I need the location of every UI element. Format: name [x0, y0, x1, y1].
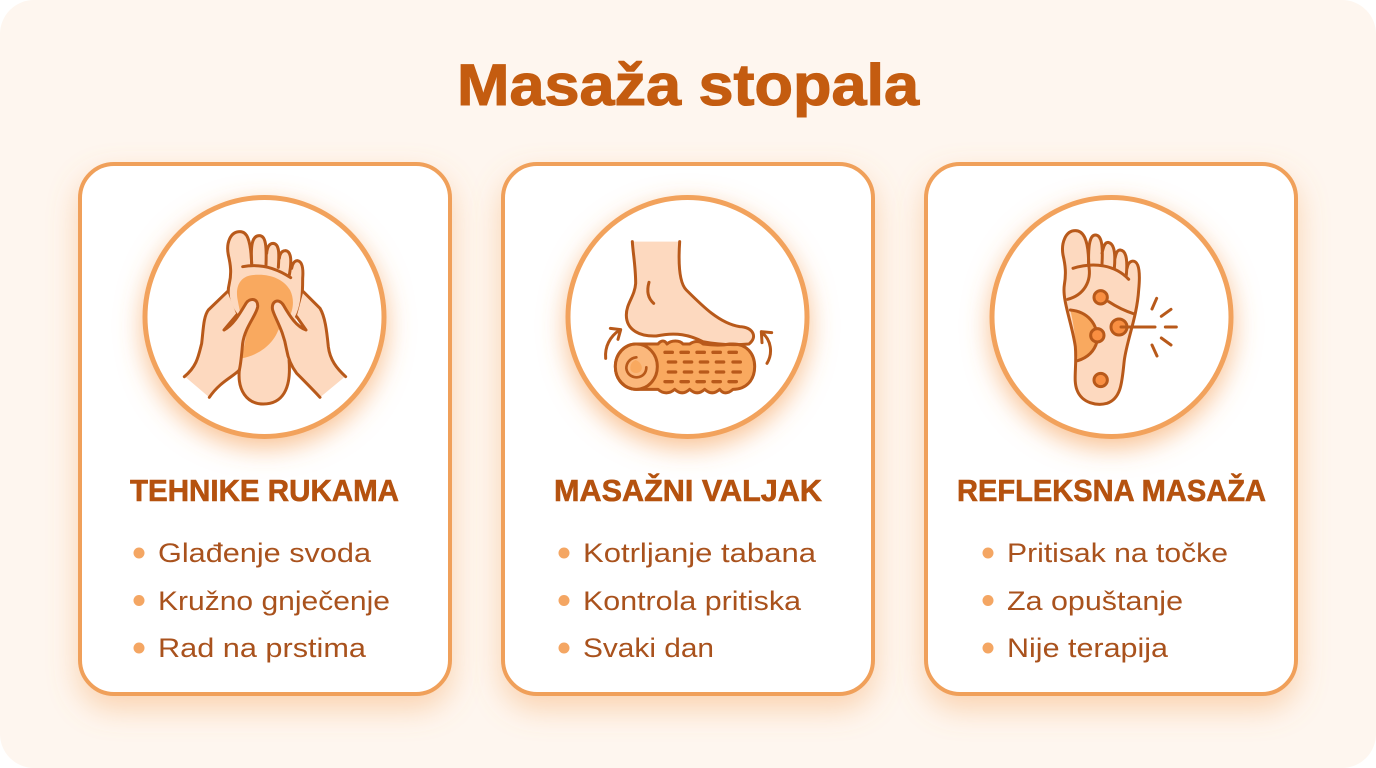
- bullet list: [982, 538, 1228, 663]
- bullet list: [134, 538, 390, 663]
- bullet list: Glađenje svoda: [158, 538, 372, 568]
- panel: masažni valjak: [503, 164, 873, 694]
- bullet list: Svaki dan: [583, 633, 714, 663]
- icon: hands massaging foot: [145, 198, 384, 436]
- bullet list: Za opuštanje: [1007, 586, 1183, 616]
- right hand: [272, 292, 345, 397]
- heading: TEHNIKE RUKAMA: [130, 473, 399, 508]
- bullet list: [558, 538, 817, 663]
- left hand: [185, 292, 258, 397]
- icon: reflexology foot map: [992, 198, 1231, 436]
- bullet list: Nije terapija: [1007, 633, 1169, 663]
- bullet list: Kontrola pritiska: [583, 586, 802, 616]
- panel: tehnike rukama: [80, 164, 450, 694]
- heading: MASAŽNI VALJAK: [554, 472, 823, 508]
- panel: refleksna masaža: [926, 164, 1296, 694]
- bullet list: Kružno gnječenje: [158, 586, 390, 616]
- heading: REFLEKSNA MASAŽA: [957, 472, 1266, 508]
- icon: foot on roller: [568, 198, 807, 436]
- bullet list: Pritisak na točke: [1007, 538, 1228, 568]
- title: Masaža stopala: [457, 53, 920, 118]
- bullet list: Kotrljanje tabana: [583, 538, 817, 568]
- bullet list: Rad na prstima: [158, 633, 367, 663]
